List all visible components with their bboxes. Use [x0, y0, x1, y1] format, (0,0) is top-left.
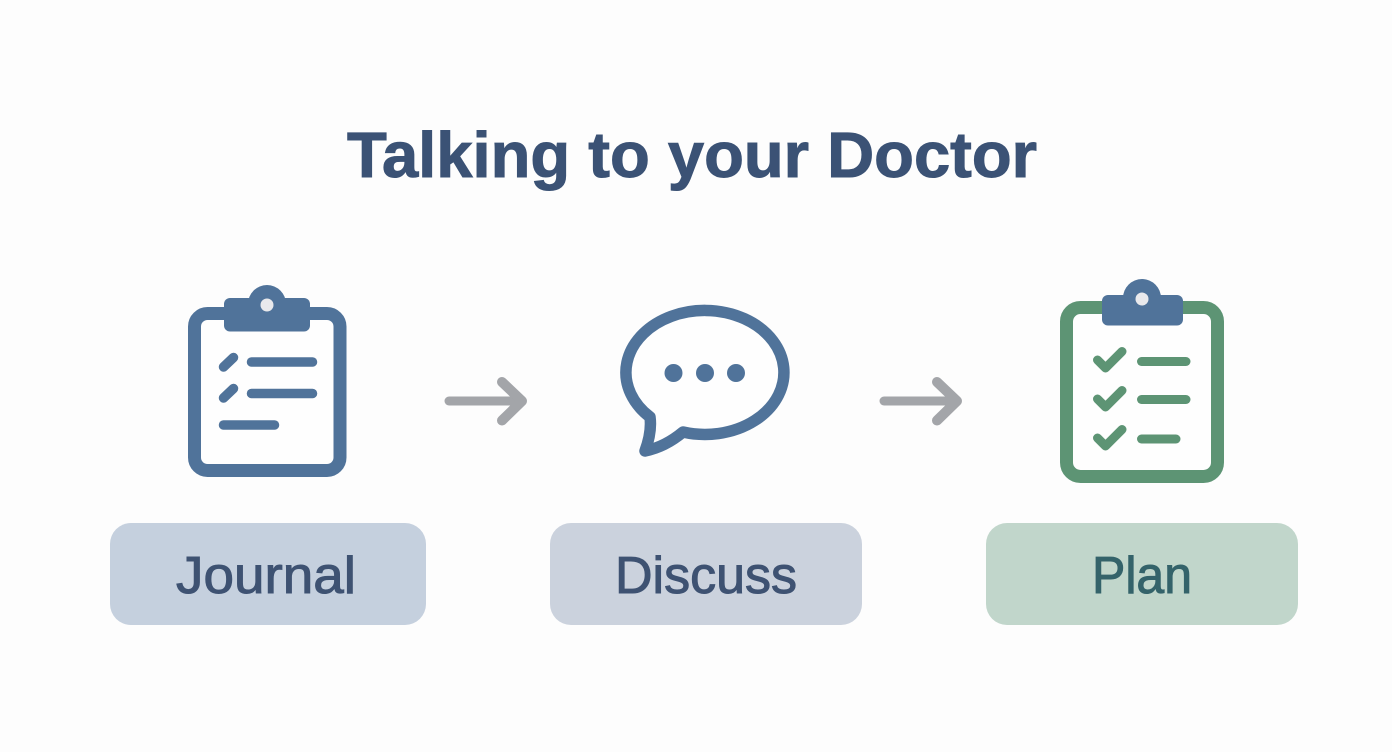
label: plan: Plan	[1092, 547, 1192, 605]
arrow: journal to discuss	[449, 382, 522, 420]
label: discuss	[550, 523, 862, 625]
title: Talking to your Doctor	[347, 119, 1037, 191]
arrow: discuss to plan	[884, 382, 957, 420]
icon: plan clipboard	[1066, 279, 1218, 476]
label: journal: Journal	[176, 547, 356, 605]
label: plan	[986, 523, 1298, 625]
label: discuss: Discuss	[615, 547, 797, 605]
label: journal	[110, 523, 426, 625]
icon: speech bubble	[626, 310, 784, 451]
icon: journal clipboard	[194, 285, 340, 470]
